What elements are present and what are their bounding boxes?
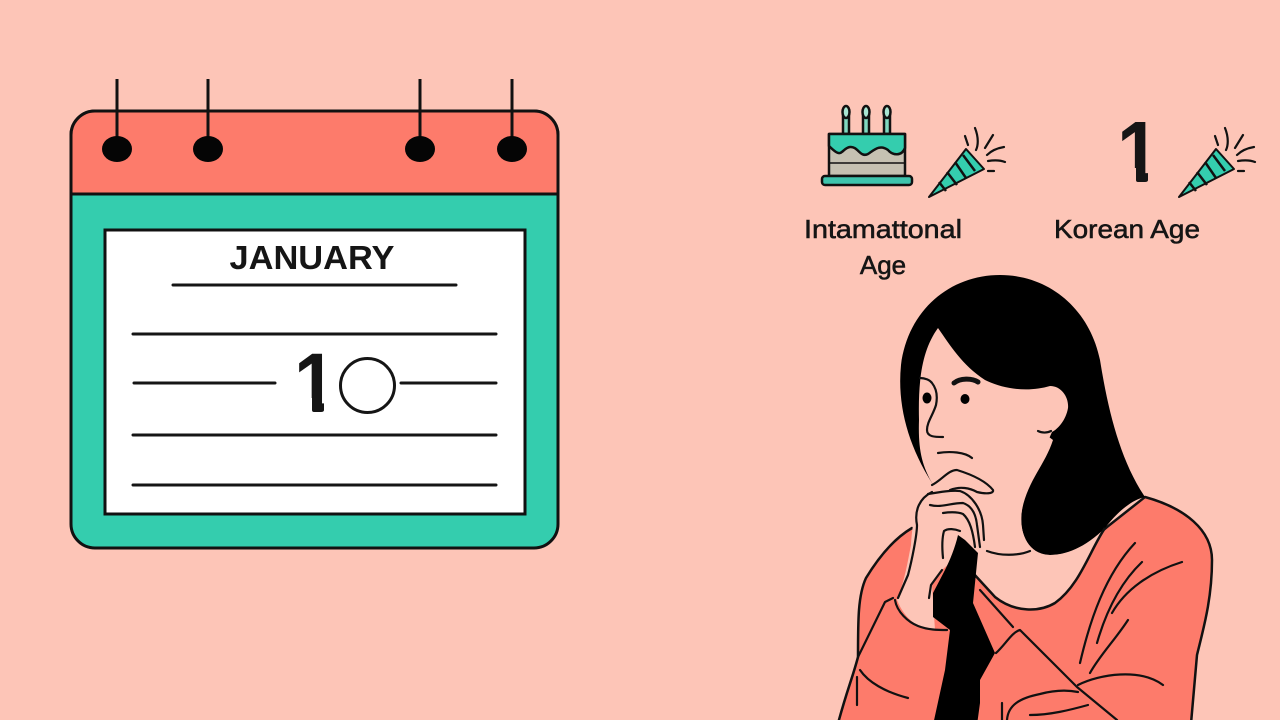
calendar: [71, 79, 558, 548]
label: international age: Intamattonal: [804, 214, 962, 244]
sweater: [835, 497, 1212, 720]
korean age group: [1056, 122, 1256, 244]
binding rings: [102, 79, 527, 162]
calendar red header: [71, 111, 558, 194]
hair strand over chest: [933, 535, 995, 720]
label: international age: Age: [860, 250, 906, 280]
date number 10: 1: [294, 336, 336, 430]
date number 10: [299, 354, 396, 414]
hand outline: [858, 470, 993, 657]
eyes: [922, 392, 970, 404]
icon: party popper: [1179, 128, 1255, 197]
sweater folds: [857, 543, 1182, 720]
international age group: [804, 106, 1005, 280]
neckline: [973, 528, 1105, 609]
hand and wrist: [897, 470, 994, 630]
calendar page: [105, 230, 525, 514]
face and neck: [919, 328, 1105, 609]
number 1: 1: [1117, 104, 1160, 201]
label: korean age: Korean Age: [1054, 214, 1200, 244]
icon: birthday cake: [822, 106, 912, 185]
icon: party popper: [929, 128, 1005, 197]
thinking woman: [835, 275, 1212, 720]
face features: [920, 378, 1051, 555]
page lines: [133, 285, 496, 485]
calendar body: [71, 111, 558, 548]
month heading: JANUARY: [230, 239, 394, 276]
label: international age: [804, 214, 962, 280]
hair: [900, 275, 1145, 555]
